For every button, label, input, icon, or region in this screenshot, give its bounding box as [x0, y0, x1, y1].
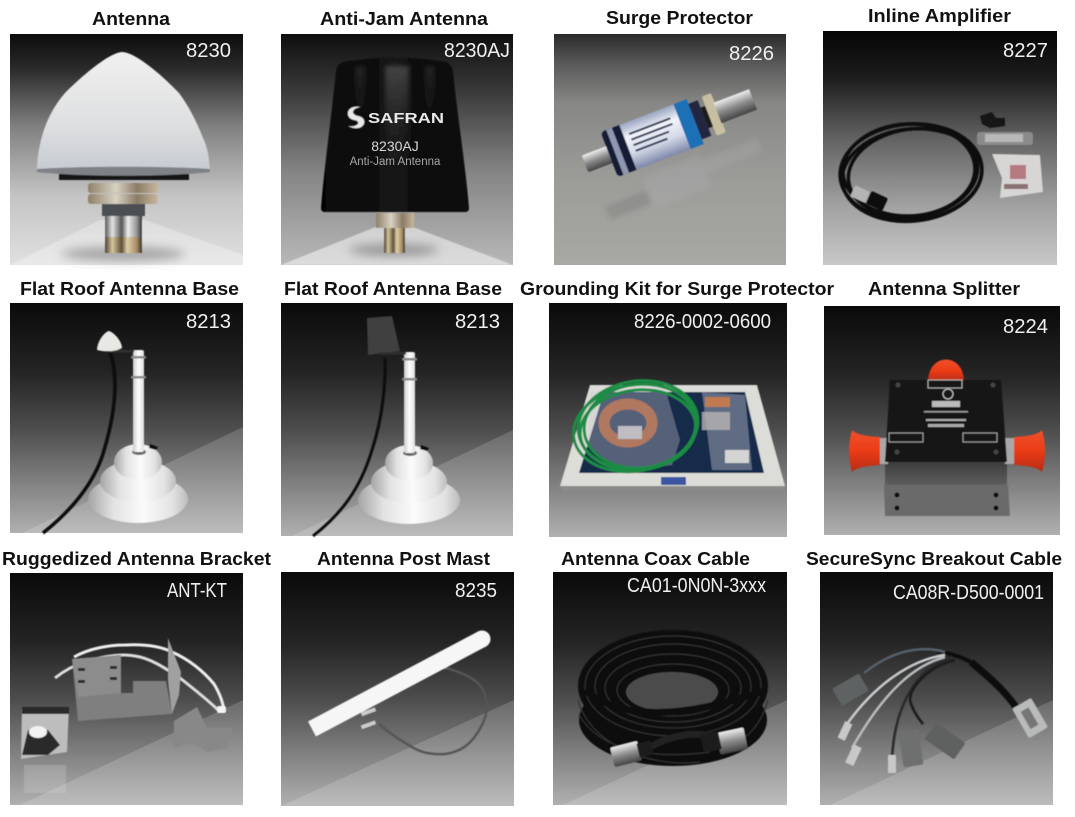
icon: cable and amplifier parts: [837, 112, 1043, 228]
title: Antenna Splitter: [868, 279, 1020, 299]
title: Antenna: [92, 9, 171, 29]
panel: Flat Roof Antenna Base 8213 (paddle): [281, 279, 513, 536]
panel: Grounding Kit for Surge Protector: [520, 279, 834, 537]
icon: surge protector cylinder: [576, 77, 768, 227]
panel: Surge Protector 8226: [554, 8, 786, 265]
panel: Antenna Coax Cable: [553, 549, 787, 805]
part number: ANT-KT: [167, 580, 227, 602]
panel: Inline Amplifier 8227: [823, 6, 1057, 265]
icon: dome antenna on stepped base: [43, 331, 188, 533]
title: Flat Roof Antenna Base: [284, 279, 502, 299]
title: Ruggedized Antenna Bracket: [2, 549, 271, 569]
title: Inline Amplifier: [868, 6, 1011, 26]
title: Anti-Jam Antenna: [320, 9, 489, 29]
photo background: [823, 31, 1057, 265]
part number: CA01-0N0N-3xxx: [627, 575, 766, 597]
title: Antenna Coax Cable: [561, 549, 750, 569]
icon: paddle antenna on stepped base: [313, 316, 460, 536]
title: Flat Roof Antenna Base: [20, 279, 239, 299]
icon: breakout cable with connectors: [832, 649, 1048, 773]
title: SecureSync Breakout Cable: [806, 549, 1062, 569]
photo background: [824, 306, 1060, 535]
part number: 8213: [186, 311, 231, 333]
part number: 8226: [729, 43, 774, 65]
part number: 8224: [1003, 316, 1048, 338]
panel: Antenna Post Mast 8235: [281, 549, 514, 806]
photo background: [554, 34, 786, 265]
photo background: [281, 34, 513, 265]
icon: black antenna with Safran label: [281, 58, 513, 265]
title: Surge Protector: [606, 8, 753, 28]
panel: Flat Roof Antenna Base 8213 (dome): [10, 279, 243, 533]
panel: SecureSync Breakout Cable: [806, 549, 1062, 805]
icon: white dome antenna: [10, 52, 243, 265]
icon: splitter box with red caps: [849, 360, 1045, 516]
part number: 8227: [1003, 40, 1048, 62]
icon: white mast and strap: [312, 630, 490, 754]
icon: bracket kit: [21, 638, 233, 793]
photo background: [281, 572, 514, 806]
label: model: 8230AJ: [371, 138, 419, 154]
part number: CA08R-D500-0001: [893, 582, 1044, 604]
photo background: [820, 572, 1053, 805]
part number: 8230: [186, 40, 231, 62]
photo background: [10, 34, 243, 265]
panel: Antenna Splitter 8224: [824, 279, 1060, 535]
panel: Ruggedized Antenna Bracket ANT-KT: [2, 549, 271, 805]
part number: 8230AJ: [444, 40, 510, 62]
icon: coiled coax cable: [578, 630, 768, 767]
part number: 8226-0002-0600: [634, 311, 771, 333]
label: product name: Anti-Jam Antenna: [350, 156, 441, 168]
icon: grounding kit on tray: [560, 373, 785, 491]
part number: 8213: [455, 311, 500, 333]
photo background: [281, 303, 513, 536]
photo background: [553, 572, 787, 805]
photo background: [10, 573, 243, 805]
part number: 8235: [455, 580, 497, 602]
panel: Antenna 8230: [10, 9, 243, 265]
label: SAFRAN: SAFRAN: [368, 110, 444, 127]
title: Grounding Kit for Surge Protector: [520, 279, 834, 299]
panel: Anti-Jam Antenna 8230AJ: [281, 9, 513, 265]
title: Antenna Post Mast: [317, 549, 490, 569]
photo background: [549, 303, 787, 537]
photo background: [10, 303, 243, 533]
